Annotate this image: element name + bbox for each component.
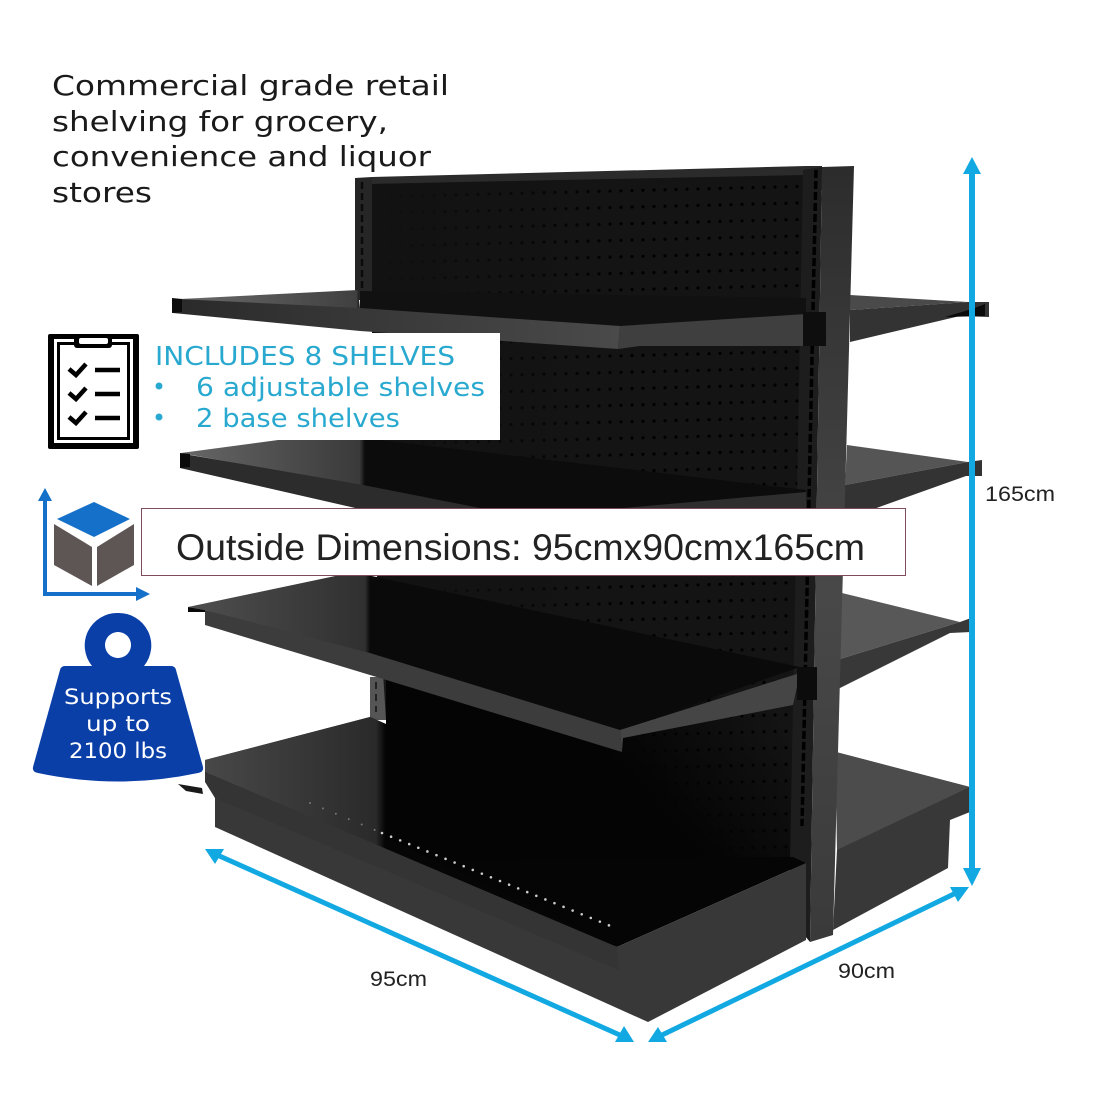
title text: stores [52, 176, 152, 209]
arrow: depth 90cm [648, 887, 969, 1042]
title text: convenience and liquor [52, 140, 432, 173]
includes text: INCLUDES 8 SHELVES [155, 342, 455, 372]
post front face [810, 166, 854, 942]
icon: cube with axes [38, 488, 150, 601]
arrow: width 95cm [205, 849, 634, 1042]
title text: shelving for grocery, [52, 105, 388, 138]
label: 90cm: 90cm [838, 960, 895, 983]
title text [52, 69, 449, 209]
includes text: 6 adjustable shelves [196, 373, 485, 403]
white backing [140, 333, 500, 440]
includes text [155, 342, 485, 434]
icon: weight with capacity: 2100 lbs [69, 739, 167, 763]
top shelf [172, 290, 826, 349]
second shelf [180, 438, 806, 510]
title text: Commercial grade retail [52, 69, 449, 102]
shelving unit [172, 166, 989, 1022]
right side shelf 1 [850, 295, 989, 342]
left upright post [355, 177, 386, 720]
pegboard back panels [372, 166, 822, 870]
includes text: 2 base shelves [196, 404, 400, 434]
label: 95cm: 95cm [370, 968, 427, 991]
icon: weight with capacity [33, 613, 203, 782]
third shelf [188, 575, 817, 752]
base shelf [178, 717, 806, 1022]
right side shelf 3 [838, 593, 971, 689]
icon: weight with capacity: up to [86, 712, 150, 736]
icon: weight with capacity: Supports [64, 685, 172, 709]
right side base shelf [833, 752, 970, 930]
outside dimensions box: Outside Dimensions: 95cmx90cmx165cm [176, 527, 865, 568]
right side shelf 2 [843, 445, 982, 520]
includes panel [140, 333, 500, 440]
icon: clipboard checklist [48, 334, 139, 449]
label: 165cm: 165cm [985, 483, 1055, 506]
arrow: height 165cm [963, 157, 981, 886]
post slotted strip [790, 167, 822, 942]
outside dimensions box [142, 508, 906, 576]
